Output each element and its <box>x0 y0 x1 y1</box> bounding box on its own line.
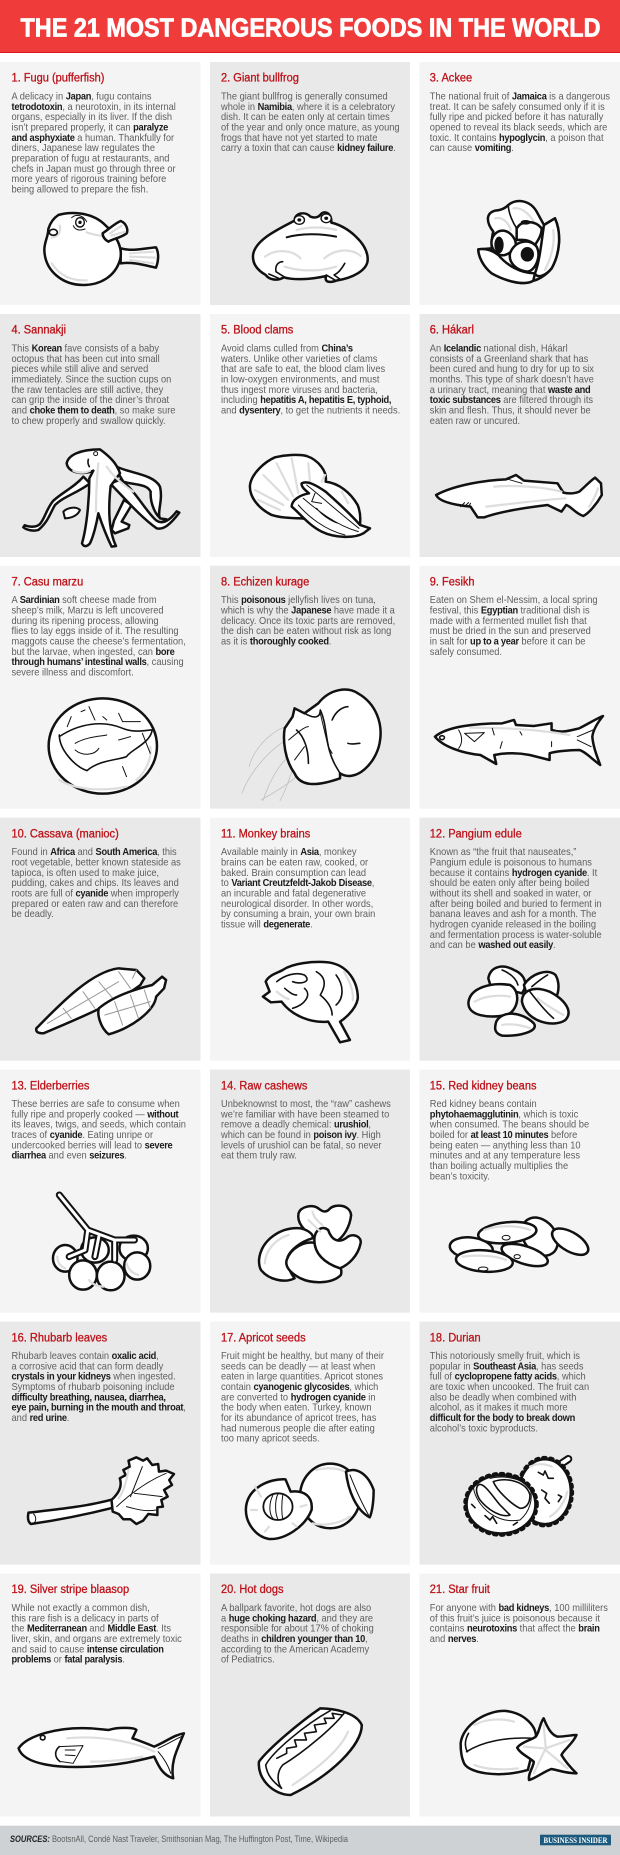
heading: Red kidney beans: 15. Red kidney beans <box>430 1080 537 1092</box>
heading: Sannakji: 4. Sannakji <box>12 324 66 337</box>
text: Hakarl: toxic substances are filtered through its <box>430 395 593 406</box>
text: Hakarl: consists of a Greenland shark that has <box>430 354 588 365</box>
text: Elderberries: traces of cyanide. Eating unripe or <box>12 1130 153 1141</box>
text: Hakarl: An Icelandic national dish, Hákarl <box>430 343 568 355</box>
sources: SOURCES: BootsnAll, Condé Nast Traveler, Smithsonian Mag, The Huffington Post, Time, Wikipedia <box>10 1834 348 1844</box>
icon: apricots <box>246 1464 374 1539</box>
panel: 11 Monkey brains <box>210 818 410 1061</box>
icon: rhubarb leaf <box>28 1457 174 1524</box>
text: Star fruit: of this fruit’s juice is poisonous because it <box>430 1613 600 1624</box>
text: Giant bullfrog: carry a toxin that can cause kidney failure. <box>221 143 396 154</box>
text: Silver stripe blaasop: this rare fish is a delicacy in parts of <box>12 1613 159 1624</box>
text: Monkey brains: Available mainly in Asia, monkey <box>221 847 357 858</box>
panel: 21 Star fruit <box>420 1574 620 1816</box>
text: Durian: are toxic when uncooked. The fruit can <box>430 1382 589 1393</box>
text: Silver stripe blaasop: liver, skin, and organs are extremely toxic <box>12 1634 182 1645</box>
text: Fugu: isn’t prepared properly, it can paralyze <box>12 122 168 134</box>
text: Sannakji: immediately. Since the suction cups on <box>12 374 171 386</box>
text: Silver stripe blaasop: and said to cause intense circulation <box>12 1644 164 1655</box>
text: Raw cashews: remove a deadly chemical: urushiol, <box>221 1119 371 1131</box>
text: Star fruit: For anyone with bad kidneys, 100 milliliters <box>430 1603 608 1614</box>
text: Cassava: root vegetable, better known stateside as <box>12 857 181 869</box>
panel: 7 Casu marzu <box>0 566 200 809</box>
text: Ackee: toxic. It contains hypoglycin, a poison that <box>430 133 604 144</box>
panel: 6 Hakarl <box>420 314 620 557</box>
text: Blood clams: that are safe to eat, the blood clam lives <box>221 364 385 375</box>
panel: 3 Ackee <box>420 62 620 305</box>
text: Casu marzu: severe illness and discomfort. <box>12 667 134 679</box>
text: Cassava: tapioca, is often used to make juice, <box>12 868 159 879</box>
text: Monkey brains: neurological disorder. In other words, <box>221 899 373 910</box>
text: Apricot seeds: for its abundance of apricot trees, has <box>221 1413 377 1424</box>
text: Hakarl: eaten raw or uncured. <box>430 416 520 427</box>
heading: Silver stripe blaasop: 19. Silver stripe blaasop <box>12 1584 129 1596</box>
panel: 5 Blood clams <box>210 314 410 557</box>
text: Elderberries: fully ripe and properly cooked — without <box>12 1109 178 1121</box>
text: Elderberries: diarrhea and even seizures. <box>12 1150 127 1162</box>
text: Fugu: tetrodotoxin, a neurotoxin, in its internal <box>12 102 176 113</box>
text: Hot dogs: responsible for about 17% of choking <box>221 1623 374 1635</box>
text: Sannakji: can grip the inside of the diner’s throat <box>12 395 169 406</box>
text: Fesikh: made with a fermented mullet fish that <box>430 616 587 627</box>
text: Pangium edule: Known as “the fruit that nauseates,” <box>430 847 576 858</box>
text: Ackee: opened to reveal its black seeds, which are <box>430 122 607 134</box>
text: Apricot seeds: too many apricot seeds. <box>221 1433 320 1445</box>
icon: mullet fish <box>435 716 603 765</box>
text: Sannakji: octopus that has been cut into small <box>12 354 160 365</box>
text: Pangium edule: without its shell and soaked in water, or <box>429 888 592 900</box>
text: Casu marzu: sheep’s milk, Marzu is left uncovered <box>12 605 164 617</box>
text: Silver stripe blaasop: the Mediterranean and Middle East. Its <box>12 1623 171 1635</box>
text: Fesikh: safely consumed. <box>430 647 502 658</box>
icon: kidney beans <box>448 1213 594 1274</box>
icon: jellyfish <box>242 690 381 801</box>
icon: blaasop fish <box>19 1728 184 1778</box>
text: Hot dogs: according to the American Academy <box>221 1644 369 1655</box>
text: Rhubarb leaves: difficulty breathing, nausea, diarrhea, <box>12 1392 166 1404</box>
text: Blood clams: thus ingest more viruses and bacteria, <box>221 385 378 396</box>
text: Monkey brains: baked. Brain consumption can lead <box>221 868 366 879</box>
icon: elderberries <box>53 1195 150 1290</box>
text: Pangium edule: Pangium edule is poisonous to humans <box>430 857 592 869</box>
icon: brain <box>263 962 358 1042</box>
text: Fugu: A delicacy in Japan, fugu contains <box>12 91 152 103</box>
text: Sannakji: pieces while still alive and served <box>12 364 148 375</box>
icon: durian <box>466 1458 572 1534</box>
header banner <box>0 0 620 53</box>
panel: 12 Pangium edule <box>420 818 620 1061</box>
panel: 8 Echizen kurage <box>210 566 410 809</box>
text: Sannakji: This Korean fave consists of a baby <box>12 343 159 355</box>
text: Red kidney beans: phytohaemagglutinin, which is toxic <box>430 1109 578 1121</box>
text: Fugu: more years of rigorous training before <box>12 174 166 185</box>
text: Giant bullfrog: dish. It can be eaten only at certain times <box>221 112 390 123</box>
heading: Pangium edule: 12. Pangium edule <box>430 828 522 841</box>
text: Pangium edule: banana leaves and ash for a month. The <box>430 909 596 920</box>
text: Giant bullfrog: The giant bullfrog is generally consumed <box>221 91 388 103</box>
text: Sannakji: and choke them to death, so make sure <box>12 405 175 417</box>
icon: cassava roots <box>36 968 166 1034</box>
text: Star fruit: contains neurotoxins that affect the brain <box>430 1623 600 1635</box>
text: Fugu: preparation of fugu at restaurants, and <box>12 153 169 165</box>
text: Ackee: The national fruit of Jamaica is a dangerous <box>430 91 610 103</box>
text: Rhubarb leaves: eye pain, burning in the mouth and throat, <box>12 1402 186 1414</box>
panel: 16 Rhubarb leaves <box>0 1322 200 1565</box>
text: Monkey brains: tissue will degenerate. <box>221 919 313 931</box>
text: Cassava: be deadly. <box>12 909 54 920</box>
logo: Business Insider: BUSINESS INSIDER <box>544 1836 608 1845</box>
icon: bullfrog <box>253 212 368 282</box>
text: Red kidney beans: minutes and at any temperature less <box>430 1150 580 1162</box>
text: Fesikh: must be dried in the sun and preserved <box>430 626 591 637</box>
text: Hot dogs: of Pediatrics. <box>221 1654 275 1666</box>
heading: Star fruit: 21. Star fruit <box>430 1584 491 1596</box>
icon: hot dog <box>259 1708 362 1795</box>
text: Monkey brains: by consuming a brain, your own brain <box>221 909 375 920</box>
text: Blood clams: and dysentery, to get the nutrients it needs. <box>221 405 400 417</box>
text: Silver stripe blaasop: While not exactly a common dish, <box>12 1603 150 1614</box>
text: Rhubarb leaves: a corrosive acid that can form deadly <box>12 1361 163 1373</box>
text: Cassava: pudding, cakes and chips. Its leaves and <box>12 878 179 889</box>
text: Cassava: roots are full of cyanide when improperly <box>12 888 179 900</box>
text: Fugu: chefs in Japan must go through three or <box>12 164 176 175</box>
text: Apricot seeds: had numerous people die after eating <box>221 1423 375 1435</box>
heading: Ackee: 3. Ackee <box>430 72 472 85</box>
panel: 19 Silver stripe blaasop <box>0 1574 200 1816</box>
text: Cassava: Found in Africa and South America, this <box>12 847 177 858</box>
text: Hot dogs: deaths in children younger than 10, <box>221 1634 368 1645</box>
heading: Rhubarb leaves: 16. Rhubarb leaves <box>12 1332 107 1344</box>
panel: 13 Elderberries <box>0 1070 200 1313</box>
text: Blood clams: including hepatitis A, hepatitis E, typhoid, <box>221 395 391 406</box>
text: Fugu: diners, Japanese law regulates the <box>12 143 155 154</box>
panel: 9 Fesikh <box>420 566 620 809</box>
text: Rhubarb leaves: Rhubarb leaves contain oxalic acid, <box>12 1351 159 1362</box>
text: Blood clams: in low-oxygen environments, and must <box>221 374 380 386</box>
text: Casu marzu: during its ripening process, allowing <box>12 616 159 627</box>
icon: pangium seeds <box>468 967 569 1036</box>
text: Apricot seeds: are converted to hydrogen cyanide in <box>221 1392 376 1404</box>
text: Durian: full of cyclopropene fatty acids, which <box>430 1371 586 1383</box>
text: Rhubarb leaves: crystals in your kidneys when ingested. <box>12 1371 176 1383</box>
text: Durian: popular in Southeast Asia, has seeds <box>430 1361 583 1373</box>
panel: 4 Sannakji <box>0 314 200 557</box>
text: Red kidney beans: boiled for at least 10 minutes before <box>430 1130 577 1141</box>
icon: star fruit <box>461 1711 576 1780</box>
heading: Apricot seeds: 17. Apricot seeds <box>221 1332 306 1344</box>
text: Rhubarb leaves: Symptoms of rhubarb poisoning include <box>12 1382 175 1393</box>
text: Fugu: being allowed to prepare the fish. <box>12 184 148 196</box>
text: Apricot seeds: contain cyanogenic glycosides, which <box>221 1382 378 1393</box>
panel: 18 Durian <box>420 1322 620 1565</box>
text: Pangium edule: should be eaten only after being boiled <box>430 878 589 889</box>
panel: 2 Giant bullfrog <box>210 62 410 305</box>
text: Casu marzu: maggots cause the cheese’s fermentation, <box>12 636 186 648</box>
heading: Fugu: 1. Fugu (pufferfish) <box>12 72 105 85</box>
text: Durian: This notoriously smelly fruit, which is <box>430 1351 580 1362</box>
text: Monkey brains: an incurable and fatal degenerative <box>221 888 366 900</box>
text: Monkey brains: to Variant Creutzfeldt-Jakob Disease, <box>221 878 374 889</box>
heading: Durian: 18. Durian <box>430 1332 481 1344</box>
icon: shark <box>436 475 602 517</box>
heading: Hot dogs: 20. Hot dogs <box>221 1584 284 1596</box>
text: Echizen kurage: as it is thoroughly cooked. <box>221 636 331 648</box>
text: Rhubarb leaves: and red urine. <box>12 1413 69 1424</box>
text: Durian: alcohol, as it makes it much more <box>430 1402 568 1414</box>
text: Monkey brains: brains can be eaten raw, cooked, or <box>221 857 369 869</box>
text: Red kidney beans: being eaten — anything less than 10 <box>430 1140 581 1152</box>
text: Red kidney beans: bean’s toxicity. <box>430 1171 490 1183</box>
text: Sannakji: to chew properly and swallow quickly. <box>12 416 166 427</box>
heading: Blood clams: 5. Blood clams <box>221 324 294 337</box>
heading: Hakarl: 6. Hákarl <box>430 324 474 337</box>
text: Pangium edule: and can be washed out easily. <box>430 940 556 951</box>
text: Pangium edule: hydrogen cyanide released in the boiling <box>430 919 596 931</box>
text: Echizen kurage: the dish can be eaten without risk as long <box>221 626 391 637</box>
icon: cashews <box>259 1206 361 1282</box>
icon: blood clams <box>250 455 370 537</box>
text: Elderberries: undercooked berries will lead to severe <box>12 1140 172 1152</box>
text: Fesikh: Eaten on Shem el-Nessim, a local spring <box>430 595 598 606</box>
text: Giant bullfrog: frogs that have not yet started to mate <box>221 133 377 144</box>
text: Ackee: can cause vomiting. <box>430 143 514 154</box>
text: Pangium edule: and fermentation process is water-soluble <box>430 930 602 941</box>
panel: 17 Apricot seeds <box>210 1322 410 1565</box>
text: Red kidney beans: when consumed. The beans should be <box>429 1119 589 1131</box>
panel: 10 Cassava <box>0 818 200 1061</box>
text: Star fruit: and nerves. <box>430 1634 479 1645</box>
text: Raw cashews: we’re familiar with have been steamed to <box>220 1109 389 1121</box>
text: Pangium edule: after being boiled and buried to ferment in <box>430 899 602 910</box>
text: Raw cashews: eat them truly raw. <box>221 1150 297 1162</box>
text: Apricot seeds: seeds can be deadly — at least when <box>221 1361 375 1373</box>
text: Cassava: prepared or eaten raw and can therefore <box>12 899 178 910</box>
text: Hakarl: a urinary tract, meaning that waste and <box>430 385 590 396</box>
text: Hakarl: been cured and hung to dry for up to six <box>430 364 594 375</box>
text: Durian: difficult for the body to break down <box>430 1413 575 1424</box>
icon: pufferfish <box>44 213 158 285</box>
text: Sannakji: the raw tentacles are still active, they <box>12 385 163 396</box>
text: Red kidney beans: than boiling actually multiplies the <box>430 1161 568 1172</box>
text: Durian: alcohol’s toxic byproducts. <box>430 1423 538 1435</box>
text: Apricot seeds: the body when eaten. Turkey, known <box>221 1402 372 1414</box>
text: Echizen kurage: This poisonous jellyfish lives on tuna, <box>221 595 376 606</box>
text: Blood clams: waters. Unlike other varieties of clams <box>220 354 378 365</box>
panel: 20 Hot dogs <box>210 1574 410 1816</box>
text: Durian: also be deadly when combined with <box>430 1392 576 1404</box>
text: Blood clams: Avoid clams culled from China’s <box>221 343 353 355</box>
heading: Giant bullfrog: 2. Giant bullfrog <box>221 72 299 85</box>
panel: 15 Red kidney beans <box>420 1070 620 1313</box>
text: Apricot seeds: eaten in large quantities. Apricot stones <box>221 1371 383 1383</box>
text: Ackee: fully ripe and picked before it has naturally <box>430 112 603 123</box>
heading: Fesikh: 9. Fesikh <box>430 576 475 589</box>
panel: 14 Raw cashews <box>210 1070 410 1313</box>
text: Casu marzu: A Sardinian soft cheese made from <box>12 595 157 606</box>
heading: Raw cashews: 14. Raw cashews <box>221 1080 308 1092</box>
text: Casu marzu: flies to lay eggs inside of it. The resulting <box>12 626 179 637</box>
text: Giant bullfrog: whole in Namibia, where it is a celebratory <box>221 102 395 113</box>
panel: 1 Fugu <box>0 62 200 305</box>
text: Elderberries: its leaves, twigs, and seeds, which contain <box>12 1119 186 1131</box>
heading: Monkey brains: 11. Monkey brains <box>221 828 311 841</box>
text: Hot dogs: A ballpark favorite, hot dogs are also <box>221 1603 371 1614</box>
text: Pangium edule: because it contains hydrogen cyanide. It <box>430 868 597 879</box>
icon: octopus <box>23 449 179 547</box>
text: Fugu: and asphyxiate a human. Thankfully for <box>12 133 174 144</box>
icon: ackee <box>478 201 559 283</box>
text: Raw cashews: which can be found in poison ivy. High <box>221 1130 381 1141</box>
text: Ackee: treat. It can be safely consumed only if it is <box>430 102 605 113</box>
icon: casu marzu cheese <box>49 698 157 794</box>
text: Casu marzu: through humans’ intestinal walls, causing <box>12 657 184 668</box>
text: Red kidney beans: Red kidney beans contain <box>430 1099 537 1110</box>
text: Elderberries: These berries are safe to consume when <box>12 1099 180 1110</box>
footer bar <box>0 1826 620 1855</box>
text: Fesikh: in salt for up to a year before it can be <box>430 636 585 648</box>
text: Giant bullfrog: of the year and only once mature, as young <box>221 122 400 134</box>
text: Hakarl: skin and flesh. Thus, it should never be <box>430 405 591 417</box>
heading: Casu marzu: 7. Casu marzu <box>12 576 83 589</box>
text: Fugu: organs, especially in its liver. If the dish <box>12 112 172 123</box>
heading: Elderberries: 13. Elderberries <box>12 1080 90 1092</box>
text: Echizen kurage: delicacy. Once its toxic parts are removed, <box>221 616 395 627</box>
text: Silver stripe blaasop: problems or fatal paralysis. <box>12 1654 125 1666</box>
text: Hakarl: months. This type of shark doesn’t have <box>430 374 594 386</box>
text: Hot dogs: a huge choking hazard, and they are <box>221 1613 373 1624</box>
text: Fesikh: festival, this Egyptian traditional dish is <box>430 605 590 617</box>
text: Echizen kurage: which is why the Japanese have made it a <box>221 605 395 617</box>
text: Apricot seeds: Fruit might be healthy, but many of their <box>221 1351 385 1362</box>
text: Casu marzu: but the larvae, when ingested, can bore <box>12 647 175 658</box>
text: Raw cashews: levels of urushiol can be fatal, so never <box>221 1140 382 1152</box>
text: Raw cashews: Unbeknownst to most, the “raw” cashews <box>221 1099 391 1110</box>
heading: Cassava: 10. Cassava (manioc) <box>12 828 119 841</box>
heading: Echizen kurage: 8. Echizen kurage <box>221 576 309 589</box>
